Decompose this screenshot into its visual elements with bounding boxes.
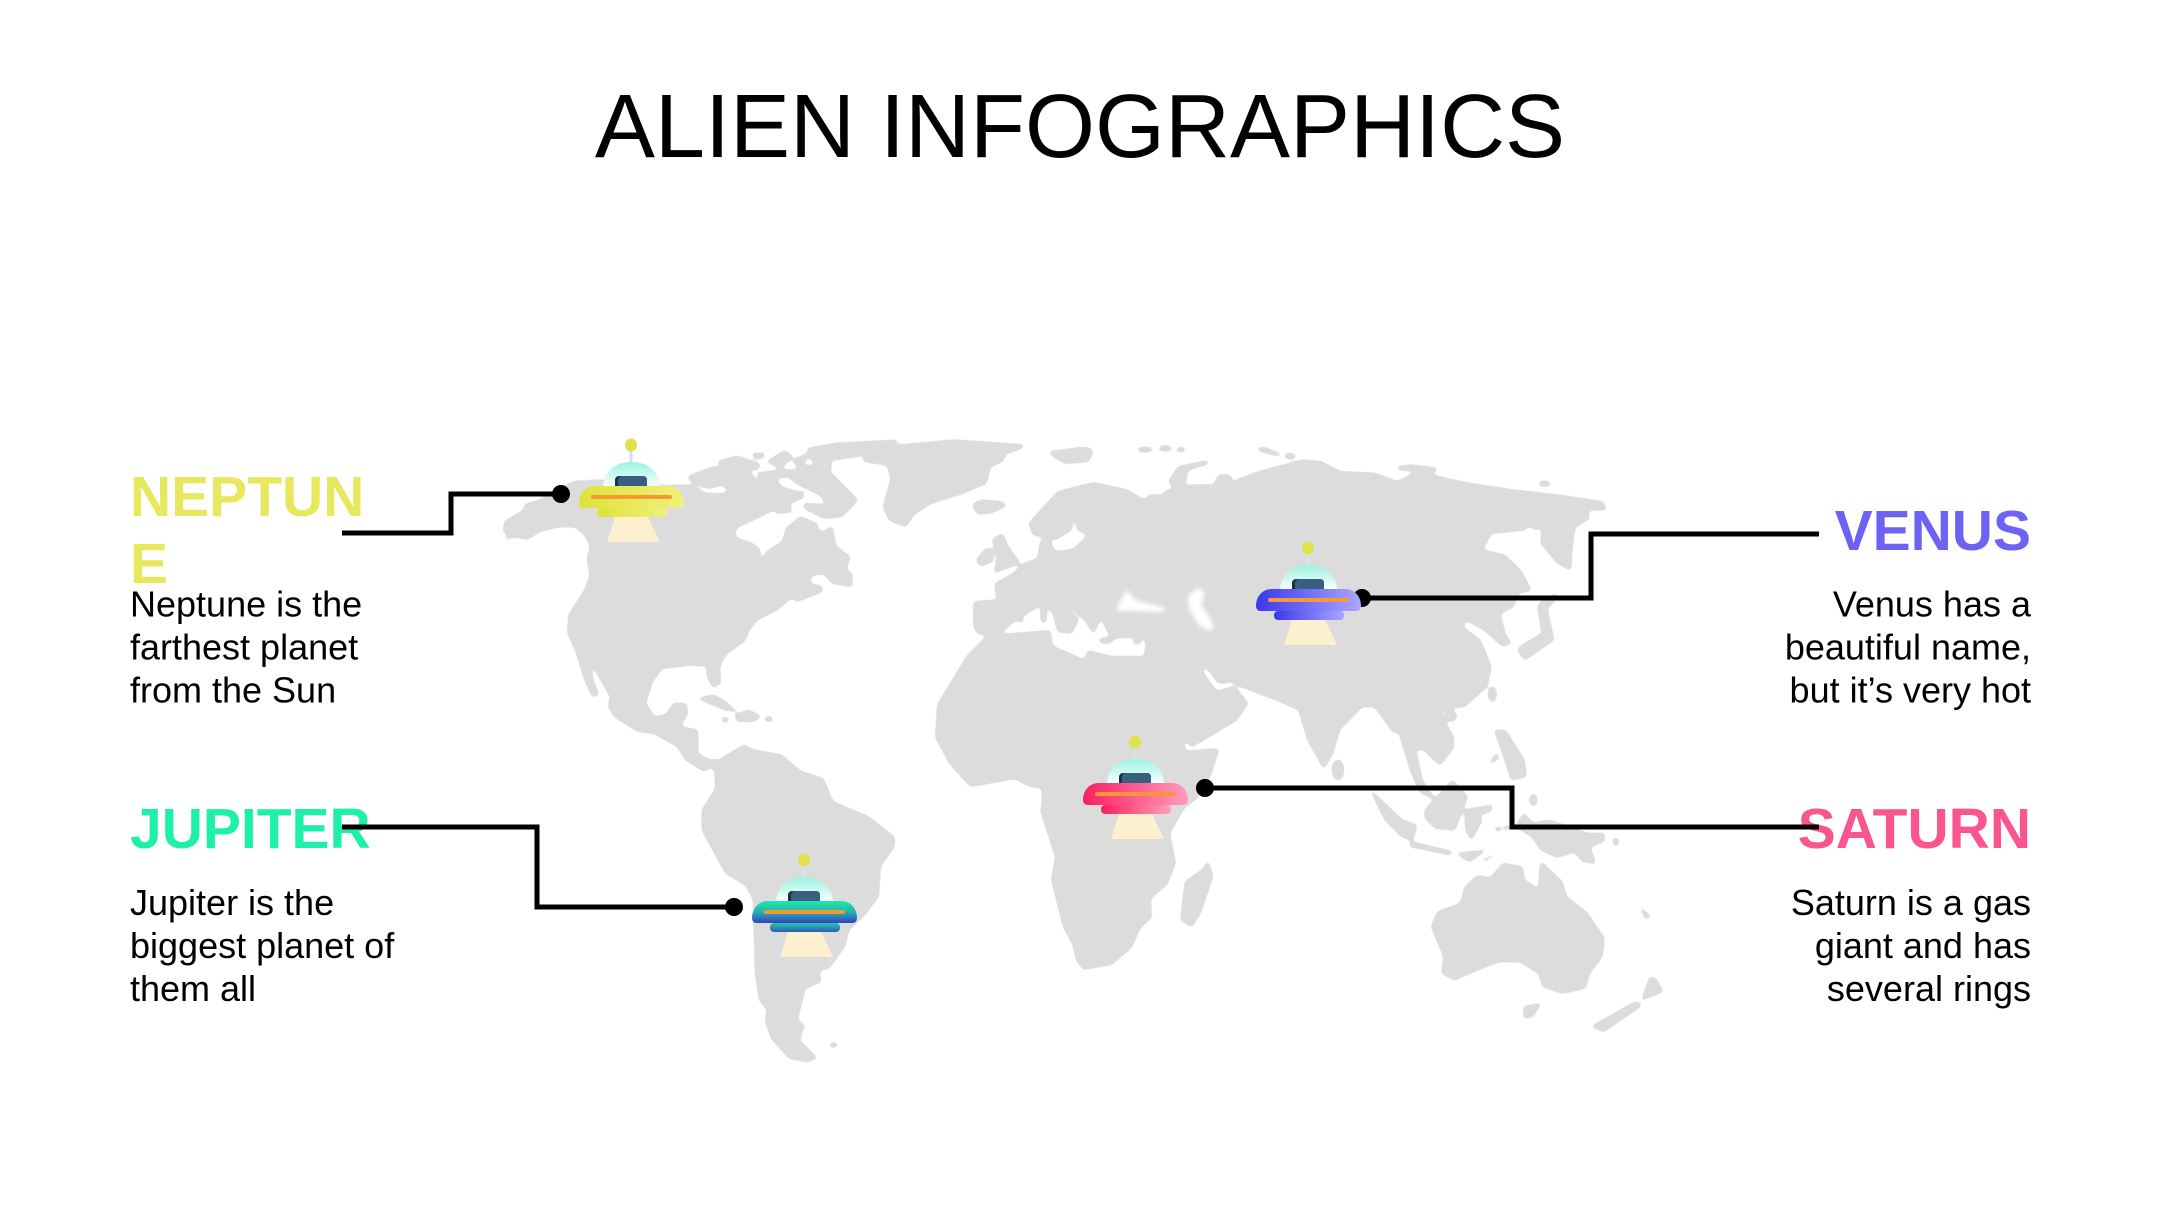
text block: Venus [1785,499,2032,710]
text block: Neptune [130,465,364,710]
icon: Neptune UFO [579,438,684,542]
south america [702,745,894,1062]
text block: Neptune: from the Sun [130,670,336,710]
connector: Venus [1353,534,1819,607]
inland seas [1120,590,1211,629]
icon: Jupiter UFO [752,854,857,957]
text block: Neptune: Neptune is the [130,584,362,624]
connector: Saturn [1196,779,1819,827]
eurasia [974,446,1606,800]
text block: Neptune: farthest planet [130,626,358,668]
connector: Neptune [342,485,570,533]
text block: Venus: but it’s very hot [1790,670,2031,710]
text block: Venus: Venus has a [1833,584,2032,624]
text block: Saturn: SATURN [1798,797,2031,861]
text block: Venus: beautiful name, [1785,626,2031,668]
text block: Jupiter: them all [130,968,256,1009]
icon: Venus UFO [1256,542,1361,645]
oceania and islands [1181,730,1663,1032]
connector: Jupiter [342,827,743,916]
text block: Venus: VENUS [1835,499,2031,563]
africa [937,632,1217,968]
text block: Jupiter: biggest planet of [130,925,395,966]
title: ALIEN INFOGRAPHICS [595,77,1565,177]
text block: Jupiter: Jupiter is the [130,882,334,923]
text block: Neptune: E [130,532,168,596]
text block: Saturn: several rings [1827,968,2031,1009]
text block: Jupiter: JUPITER [130,797,371,861]
icon: Saturn UFO [1083,736,1188,839]
text block: Neptune: NEPTUN [130,465,364,529]
world map [498,440,1663,1062]
americas and arctic [498,440,1092,771]
text block: Saturn [1791,797,2031,1009]
text block: Jupiter [130,797,395,1009]
text block: Saturn: giant and has [1815,925,2031,966]
text block: Saturn: Saturn is a gas [1791,882,2031,923]
